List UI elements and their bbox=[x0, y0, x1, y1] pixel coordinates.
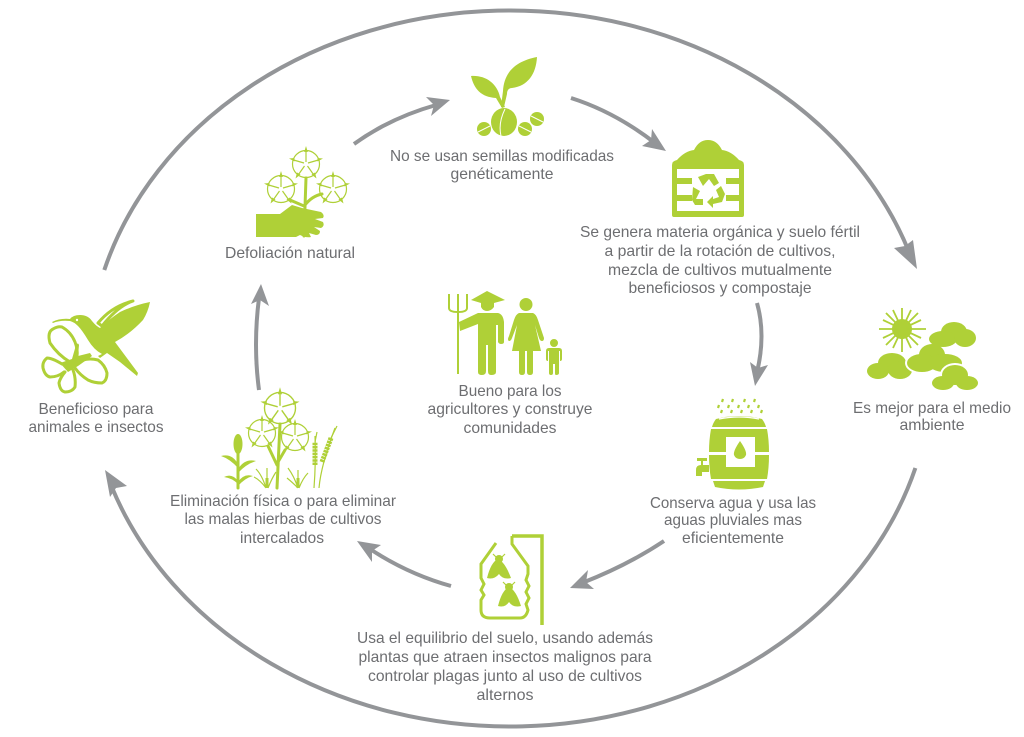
icon: child bbox=[546, 339, 562, 375]
arrow: bottle to plants bbox=[357, 541, 451, 586]
text: eliminación física: intercalados bbox=[240, 530, 324, 547]
arrow: outer bottom arc bbox=[105, 468, 915, 727]
text: medio ambiente: ambiente bbox=[900, 417, 965, 434]
icon: intercropped plants bbox=[221, 387, 337, 488]
icon: butterfly bbox=[43, 327, 107, 392]
text: equilibrio del suelo: alternos bbox=[476, 687, 534, 704]
text: conserva agua: Conserva agua y usa las bbox=[650, 495, 816, 512]
text: semillas: No se usan semillas modificadas bbox=[390, 148, 614, 165]
icon: sun and clouds bbox=[867, 308, 980, 392]
arrow: compost to barrel bbox=[750, 303, 768, 386]
icon: compost bin with recycling bbox=[672, 140, 744, 217]
text: agricultores bbox=[428, 383, 593, 437]
text: conserva agua: eficientemente bbox=[682, 530, 784, 547]
text: materia orgánica: Se genera materia orgánica y suelo fértil bbox=[580, 224, 860, 241]
text: beneficioso: Beneficioso para bbox=[38, 401, 154, 418]
icon: seedling bbox=[471, 57, 544, 136]
arrow: seeds to compost bbox=[571, 98, 666, 151]
text: eliminación física: las malas hierbas de cultivos bbox=[184, 511, 382, 528]
text: conserva agua bbox=[650, 495, 816, 547]
arrow: outer top arc bbox=[104, 11, 917, 270]
text: beneficioso: animales e insectos bbox=[28, 419, 164, 436]
icon: hand with cotton flowers bbox=[256, 146, 350, 237]
text: equilibrio del suelo: controlar plagas junto al uso de cultivos bbox=[368, 668, 642, 685]
text: materia orgánica: mezcla de cultivos mutualmente bbox=[608, 262, 832, 279]
text: eliminación física: Eliminación física o para eliminar bbox=[170, 493, 397, 510]
icon: rain barrel bbox=[696, 399, 769, 490]
text: semillas bbox=[390, 148, 614, 183]
icon: farmer family bbox=[449, 291, 562, 375]
text: conserva agua: aguas pluviales mas bbox=[664, 512, 802, 529]
text: equilibrio del suelo bbox=[357, 630, 653, 704]
icon: woman bbox=[508, 298, 544, 375]
text: eliminación física bbox=[170, 493, 397, 547]
text: beneficioso bbox=[28, 401, 164, 436]
text: medio ambiente: Es mejor para el medio bbox=[853, 400, 1011, 417]
text: defoliación: Defoliación natural bbox=[225, 245, 355, 262]
icon: hummingbird and butterfly bbox=[43, 301, 150, 392]
icon: recycling symbol bbox=[692, 174, 725, 208]
text: semillas: genéticamente bbox=[450, 166, 554, 183]
text: agricultores: Bueno para los bbox=[458, 383, 562, 400]
icon: insect trap bottle bbox=[481, 536, 542, 625]
text: materia orgánica: a partir de la rotación de cultivos, bbox=[604, 243, 836, 260]
arrow: barrel to bottle bbox=[570, 541, 664, 589]
arrow: defoliation to seeds bbox=[354, 97, 450, 144]
text: materia orgánica: beneficiosos y compostaje bbox=[628, 280, 812, 297]
text: equilibrio del suelo: Usa el equilibrio del suelo, usando además bbox=[357, 630, 653, 647]
icon: hummingbird bbox=[52, 302, 150, 376]
arrow: plants to defoliation bbox=[251, 284, 269, 390]
text: equilibrio del suelo: plantas que atraen insectos malignos para bbox=[358, 649, 652, 666]
text: medio ambiente bbox=[853, 400, 1011, 434]
text: materia orgánica bbox=[580, 224, 860, 297]
text: agricultores: comunidades bbox=[464, 420, 556, 437]
icon: pitchfork bbox=[449, 294, 467, 374]
icon: farmer bbox=[459, 291, 505, 375]
text: agricultores: agricultores y construye bbox=[428, 401, 593, 418]
